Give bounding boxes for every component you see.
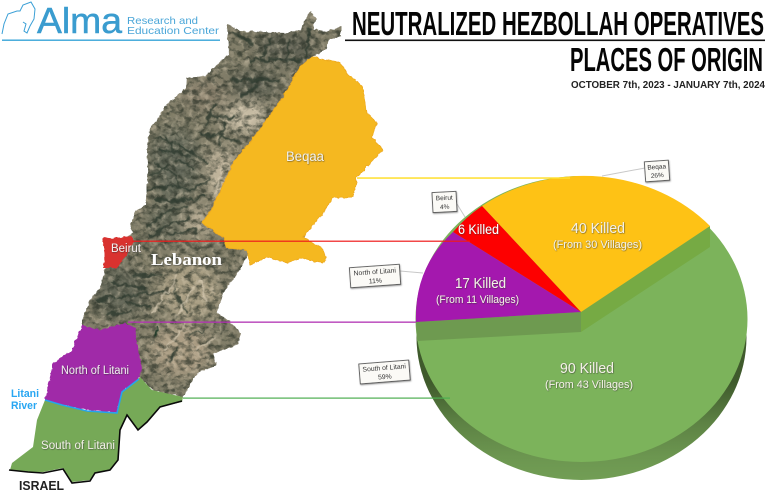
callout: South of Litani 59%: South of Litani — [362, 363, 407, 374]
logo: Alma Research and Education Center — [2, 0, 220, 41]
map region: North of Litani — [45, 323, 142, 413]
logo subtitle — [127, 15, 220, 37]
icon: Lebanon outline — [2, 2, 35, 34]
label: from 11 villages: (From 11 Villages) — [436, 294, 519, 306]
terrain ridges — [97, 30, 310, 362]
callout: North of Litani 11% — [349, 264, 423, 288]
callout: Beirut 4%: Beirut — [436, 195, 453, 202]
callout: North of Litani 11%: North of Litani — [353, 268, 397, 277]
map: Lebanon satellite terrain — [82, 11, 342, 397]
Israel border line — [9, 401, 182, 483]
terrain light streaks — [153, 108, 262, 350]
label: 40 Killed: 40 Killed — [571, 221, 625, 237]
logo wordmark: Alma — [37, 0, 123, 41]
label: North of Litani: North of Litani — [61, 365, 129, 377]
map region: South of Litani — [10, 377, 183, 482]
label: 90 Killed: 90 Killed — [560, 361, 614, 377]
cut wall right — [581, 226, 710, 332]
title block — [345, 5, 765, 91]
callout: Beirut 4% — [432, 191, 465, 217]
label: Israel: ISRAEL — [19, 478, 64, 493]
logo subtitle: Research and — [127, 15, 198, 27]
leader line: North of Litani — [128, 322, 416, 323]
callout: Beqaa 26%: 26% — [651, 172, 664, 180]
label: Lebanon: Lebanon — [151, 250, 223, 269]
callout: South of Litani 59%: 59% — [378, 373, 392, 382]
label: Beqaa: Beqaa — [286, 149, 324, 164]
leader line: Beqaa — [357, 177, 570, 179]
callout: North of Litani 11%: 11% — [369, 278, 382, 285]
pie slice: North of Litani — [416, 232, 581, 322]
Litani River line — [45, 379, 139, 413]
label: from 43 villages: (From 43 Villages) — [545, 379, 633, 391]
label: Litani River: Litani — [11, 388, 39, 400]
pie slice: Beirut — [453, 206, 581, 312]
pie side wall — [416, 194, 746, 480]
cut wall left — [416, 312, 581, 341]
pie slice: Beqaa — [482, 176, 710, 312]
leader line: Beirut — [132, 241, 470, 242]
callout: South of Litani 59% — [359, 360, 410, 384]
logo subtitle: Education Center — [127, 25, 220, 37]
callout: Beirut 4%: 4% — [440, 204, 450, 211]
pie slice: South of Litani — [416, 176, 748, 462]
label: South of Litani: South of Litani — [41, 440, 115, 452]
label: Beirut: Beirut — [111, 243, 142, 255]
label: Litani River — [11, 388, 39, 412]
leader line: South of Litani — [183, 398, 450, 399]
label: 17 Killed: 17 Killed — [455, 276, 506, 292]
label: 6 Killed: 6 Killed — [458, 221, 499, 237]
map region: Beirut — [102, 236, 133, 268]
pie chart — [416, 176, 748, 480]
pie labels — [436, 221, 642, 391]
label: Litani River: River — [11, 400, 38, 412]
map labels — [11, 149, 324, 493]
map region: Beqaa — [202, 57, 383, 265]
callout: Beqaa 26%: Beqaa — [647, 163, 667, 172]
callout: Beqaa 26% — [602, 160, 670, 182]
label: from 30 villages: (From 30 Villages) — [553, 239, 642, 251]
